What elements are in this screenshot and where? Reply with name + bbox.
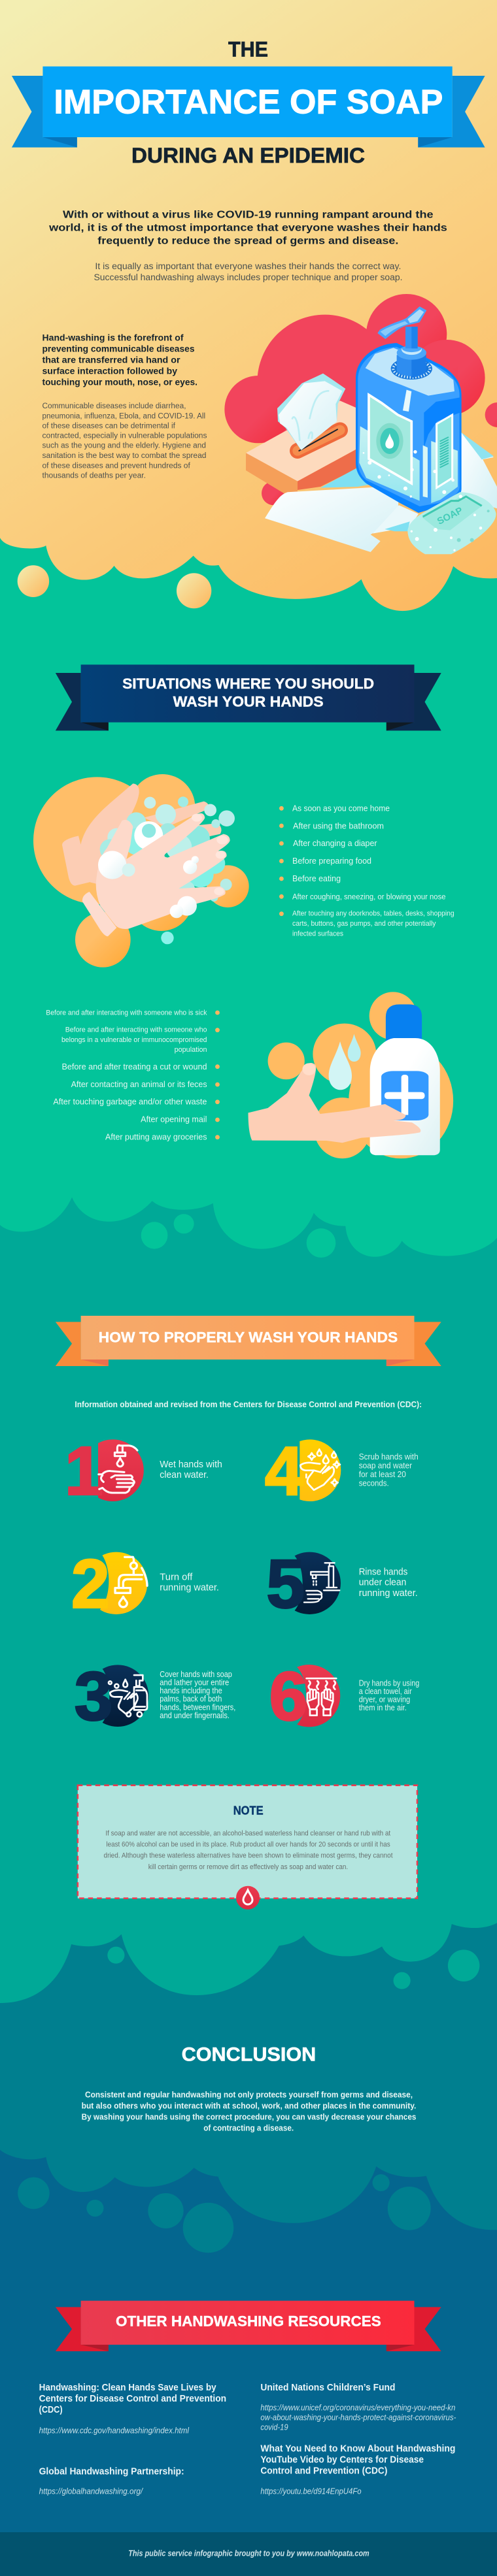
resource: UNICEF: covid-19 [260,2423,288,2432]
step 2 text [160,1571,219,1593]
note body text: dried. Although these waterless alternatives have been shown to eliminate most germs, they cannot [103,1852,393,1860]
white cross [385,1075,424,1115]
intro bold paragraph: frequently to reduce the spread of germs and disease. [97,235,398,246]
red cloud backdrop [224,294,497,505]
communicable diseases paragraph: Communicable diseases include diarrhea, [42,402,186,410]
tissue [277,374,345,450]
step 3 text: and lather your entire [160,1678,229,1687]
illustration: hand sanitizer bottle [248,992,453,1158]
checklist: situations on the right [279,804,454,937]
hand-washing bold statement: surface interaction followed by [42,367,178,376]
step 6 icon: dry hands [269,1659,340,1735]
resource: CDC YouTube video: What You Need to Know About Handwashing [260,2443,455,2454]
step 1 circle [98,1439,144,1501]
conclusion paragraph: but also others who you interact with at school, work, and other places in the community. [82,2100,416,2110]
step 3 text [160,1670,235,1720]
intro regular paragraph: It is equally as important that everyone washes their hands the correct way. [95,261,401,271]
step 2 icon: turn off water [71,1546,147,1623]
checklist: situations on the right: After using the bathroom [293,821,384,830]
checklist: situations on the right: After coughing, sneezing, or blowing your nose [292,894,446,902]
communicable diseases paragraph: such as the young and the elderly. Hygiene and [42,442,206,450]
step 1 text [160,1459,222,1480]
footer credit: This public service infographic brought to you by www.noahlopata.com [128,2549,369,2558]
blue cross plate [381,1071,428,1120]
step 2 pictogram [115,1557,147,1607]
checklist: situations on the right: Before eating [292,874,341,883]
tissue box [246,400,358,495]
small water drop [348,1034,361,1062]
title line: during an epidemic: DURING AN EPIDEMIC [131,144,365,167]
title line: importance of soap: IMPORTANCE OF SOAP [54,83,443,121]
resource: CDC handwashing [39,2383,226,2435]
orange backdrop circles [33,774,249,968]
step 5 text: under clean [359,1577,406,1588]
checklist: situations on the left: After putting away groceries [105,1133,207,1142]
conclusion paragraph [82,2089,416,2133]
intro bold paragraph: world, it is of the utmost importance that everyone washes their hands [48,222,447,233]
heading ribbon: how to properly wash your hands [56,1316,441,1366]
checklist: situations on the right: After changing a diaper [293,839,377,848]
step 3 circle cut-out [77,1663,109,1729]
heading text line 1: SITUATIONS WHERE YOU SHOULD [122,676,374,692]
step 4 text: Scrub hands with [359,1452,419,1461]
background: dark teal conclusion section with cloud edge [0,1923,497,2576]
resource: global handwashing partnership: Global Handwashing Partnership: [39,2466,184,2477]
bottle feed tube [403,390,411,412]
bottle bubbles [363,450,454,498]
resource: global handwashing partnership [39,2466,184,2496]
bottle side label [437,415,453,488]
checklist: situations on the left: belongs in a vulnerable or immunocompromised [61,1036,207,1044]
step 6 circle [278,1665,340,1727]
step 6 number: 6 [269,1659,307,1735]
background: warm yellow intro section [0,0,497,660]
step 3 text: palms, back of both [160,1695,222,1704]
hand-washing bold statement: touching your mouth, nose, or eyes. [42,378,197,387]
background: teal how-to section with cloud edge [0,1198,497,2073]
resource: CDC YouTube video: Control and Prevention (CDC) [260,2466,387,2476]
communicable diseases paragraph: of these diseases and prevent hundreds of [42,462,191,470]
step 2 text: Turn off [160,1571,193,1582]
step 1 icon: wet hands [65,1433,144,1510]
step 1 text: clean water. [160,1469,209,1480]
heading ribbon: situations where you should wash your hands [56,664,441,730]
step 6 text: dryer, or waving [359,1695,410,1704]
step 5 number: 5 [266,1546,305,1623]
resource: UNICEF [260,2383,456,2432]
step 4 text [359,1452,419,1488]
step 3 number: 3 [75,1659,112,1735]
communicable diseases paragraph: of these diseases can be detrimental if [42,422,176,430]
orange backdrop blobs [268,992,453,1158]
step 3 text: hands, between fingers, [160,1703,235,1712]
checklist: situations on the right: Before preparing food [292,856,371,866]
step 5 text [359,1567,418,1599]
step 3 pictogram [109,1675,147,1717]
step 4 icon: scrub hands [265,1433,341,1510]
communicable diseases paragraph: thousands of deaths per year. [42,472,146,480]
bubbles on teal section edge [141,1214,335,1258]
resource: UNICEF: United Nations Children’s Fund [260,2383,395,2393]
resource: global handwashing partnership: https://globalhandwashing.org/ [39,2487,144,2496]
illustration: soap dispenser, tissue box, towel and soap bar [224,294,497,554]
step 2 circle [85,1552,147,1614]
bullet dots [279,806,284,916]
bottle cap [386,1004,422,1043]
water drops [329,1041,352,1090]
step 4 number: 4 [265,1433,303,1510]
checklist: situations on the left: Before and after interacting with someone who [65,1026,207,1034]
step 6 text [359,1678,419,1712]
step 6 pictogram [307,1678,336,1716]
step 3 icon: soap and lather [75,1659,148,1735]
step 5 circle [279,1552,341,1614]
step 1 pictogram [99,1445,137,1493]
step 4 text: soap and water [359,1460,413,1470]
hand-washing bold statement [42,333,197,387]
intro regular paragraph: Successful handwashing always includes proper technique and proper soap. [94,272,403,282]
step 2 text: running water. [160,1582,219,1593]
step 5 circle cut-out [267,1550,303,1616]
footer [0,2532,497,2576]
resource: CDC handwashing: (CDC) [39,2405,63,2415]
bubbles on green section edge [18,565,211,608]
background: blue resources section with cloud edge [0,2150,497,2576]
communicable diseases paragraph: sanitation is the best way to combat the spread [42,452,207,460]
note heading: NOTE [233,1804,264,1818]
fingernail [302,1063,316,1075]
icon: red water drop badge [236,1886,260,1910]
intro regular paragraph [94,261,403,282]
communicable diseases paragraph [42,402,207,480]
step 6 text: a clean towel, air [359,1687,412,1696]
step 2 circle cut-out [75,1548,109,1614]
bottle top highlight [366,348,454,396]
note body text: least 60% alcohol can be used in its place. Rub product all over hands for 20 seconds or until it has [106,1841,390,1849]
title line: THE: THE [228,38,268,61]
callout: note panel [78,1785,417,1910]
communicable diseases paragraph: pneumonia, influenza, Ebola, and COVID-19. All [42,412,205,420]
checklist: situations on the right: As soon as you come home [292,804,390,813]
heading text: HOW TO PROPERLY WASH YOUR HANDS [99,1329,398,1345]
pump head [377,306,426,339]
supporting hand [248,1063,420,1143]
resource: CDC handwashing: https://www.cdc.gov/handwashing/index.html [39,2426,190,2435]
resource: CDC handwashing: Centers for Disease Control and Prevention [39,2394,226,2404]
resource: CDC YouTube video: https://youtu.be/d914EnpU4Fo [260,2487,362,2496]
soap bar lettering: SOAP [436,506,465,527]
soap dispenser bottle [356,306,462,513]
foam bubble highlight [142,824,156,838]
lower towel fold [373,505,419,534]
soap bar [407,492,496,554]
step 3 text: hands including the [160,1686,222,1695]
aqua fabric behind the bottle [320,468,371,488]
step 5 icon: rinse hands [266,1546,341,1623]
checklist: situations on the left [46,1009,220,1142]
checklist: situations on the left: population [175,1046,207,1054]
bullet dots [215,1011,220,1139]
hand-washing bold statement: Hand-washing is the forefront of [42,333,184,343]
step 2 number: 2 [71,1546,110,1623]
conclusion paragraph: Consistent and regular handwashing not only protects yourself from germs and disease, [85,2089,413,2099]
blue title ribbon [12,67,485,148]
step 4 text: seconds. [359,1478,389,1488]
illustration: soapy hands [33,774,249,968]
white foam bubble [134,821,163,850]
step 6 circle cut-out [271,1663,306,1729]
communicable diseases paragraph: contracted, especially in vulnerable populations [42,432,207,440]
heading ribbon: other handwashing resources [56,2301,441,2351]
hand-washing bold statement: preventing communicable diseases [42,344,195,354]
checklist: situations on the left: Before and after interacting with someone who is sick [46,1009,207,1017]
note body text: If soap and water are not accessible, an alcohol-based waterless hand cleanser or hand rub with at [105,1829,391,1837]
foam on hands [98,851,199,918]
pump stem [405,327,418,348]
source note: Information obtained and revised from the Centers for Disease Control and Prevention (CDC): [75,1400,422,1409]
step 3 circle [87,1665,148,1727]
title: the importance of soap during an epidemic [12,38,485,167]
checklist: situations on the left: After opening mail [141,1115,207,1124]
step 5 text: Rinse hands [359,1567,407,1578]
step 4 text: for at least 20 [359,1469,406,1479]
note body text [103,1829,393,1871]
step 5 text: running water. [359,1588,418,1599]
heading text line 2: WASH YOUR HANDS [173,694,324,710]
bubbles on resources section edge [18,2174,431,2253]
bubbles on conclusion section edge [107,1947,479,1989]
note panel box [78,1785,417,1899]
step 4 circle [300,1439,341,1501]
bottle body [370,1038,440,1155]
step 3 text: and under fingernails. [160,1711,230,1720]
intro bold paragraph [48,209,447,246]
conclusion heading: CONCLUSION [182,2044,316,2065]
step 3 text: Cover hands with soap [160,1670,232,1679]
fingernails [192,814,228,895]
back towel [461,432,497,508]
checklist: situations on the left: After touching garbage and/or other waste [53,1098,207,1107]
resource: UNICEF: https://www.unicef.org/coronavirus/everything-you-need-kn [260,2404,455,2413]
intro bold paragraph: With or without a virus like COVID-19 running rampant around the [63,209,434,220]
heading text: OTHER HANDWASHING RESOURCES [116,2313,381,2330]
checklist: situations on the left: Before and after treating a cut or wound [61,1062,207,1071]
step 4 pictogram [300,1449,340,1490]
resource: CDC YouTube video: YouTube Video by Centers for Disease [260,2454,424,2465]
background: green situations section with cloud edge [0,538,497,1377]
pump collar [391,358,432,380]
conclusion paragraph: By washing your hands using the correct procedure, you can vastly decrease your chances [82,2112,416,2122]
checklist: situations on the right: After touching any doorknobs, tables, desks, shopping [292,910,454,918]
checklist: situations on the left: After contacting an animal or its feces [71,1080,207,1089]
step 1 text: Wet hands with [160,1459,222,1470]
back hand [62,783,222,886]
step 6 text: Dry hands by using [359,1678,419,1687]
checklist: situations on the right: carts, buttons, gas pumps, and other potentially [292,920,436,928]
checklist: situations on the right: infected surfaces [292,930,343,937]
bottle main label [369,395,411,483]
resource: UNICEF: ow-about-washing-your-hands-protect-against-coronavirus- [260,2413,456,2422]
hand-washing bold statement: that are transferred via hand or [42,355,180,365]
conclusion paragraph: of contracting a disease. [203,2123,294,2133]
soap bubbles behind hands [100,796,235,944]
front towel [265,487,398,552]
step 6 text: them in the air. [359,1703,407,1712]
step 1 number: 1 [65,1433,103,1510]
resource: CDC YouTube video [260,2443,455,2496]
soap liquid [359,426,420,501]
note body text: kill certain germs or remove dirt as effectively as soap and water can. [148,1863,348,1871]
step 5 pictogram [304,1563,339,1603]
front hand [82,813,230,936]
resource: CDC handwashing: Handwashing: Clean Hands Save Lives by [39,2383,216,2393]
label drop emblem [376,423,403,459]
